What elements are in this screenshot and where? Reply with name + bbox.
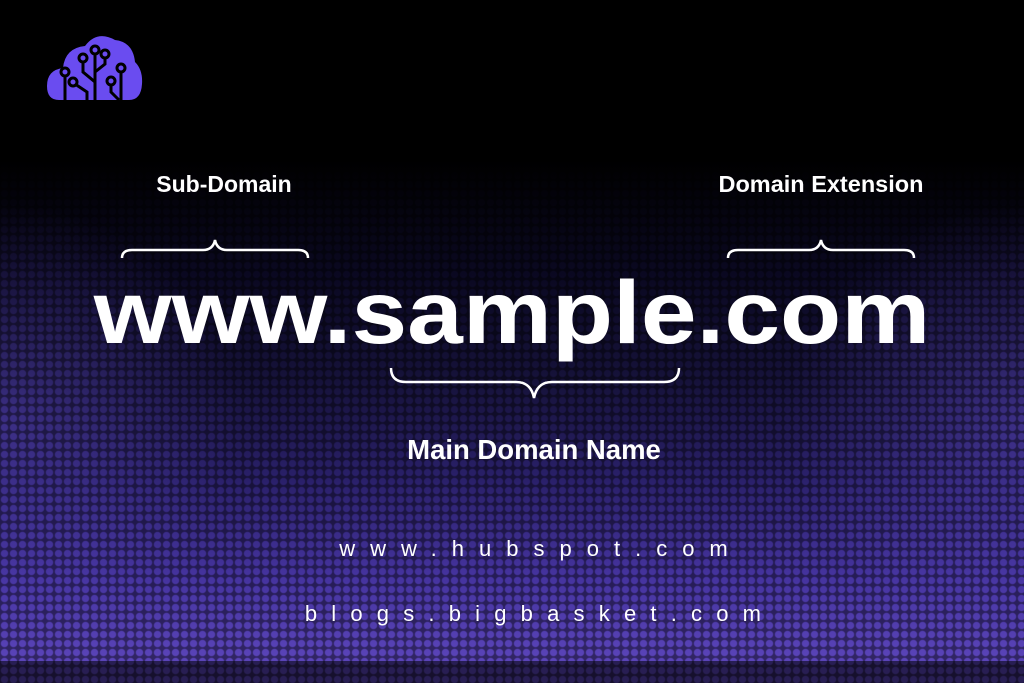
brace: extension <box>726 240 916 258</box>
brace: sub-domain <box>120 240 310 258</box>
example: hubspot: www.hubspot.com <box>339 536 743 561</box>
label: Sub-Domain: Sub-Domain <box>156 171 292 197</box>
brace: main domain <box>390 368 680 398</box>
icon: cloud logo <box>47 36 142 100</box>
example: bigbasket: blogs.bigbasket.com <box>305 601 775 626</box>
label: Main Domain Name: Main Domain Name <box>407 434 661 465</box>
main url: www.sample.com <box>94 262 930 362</box>
label: Domain Extension: Domain Extension <box>718 171 924 197</box>
